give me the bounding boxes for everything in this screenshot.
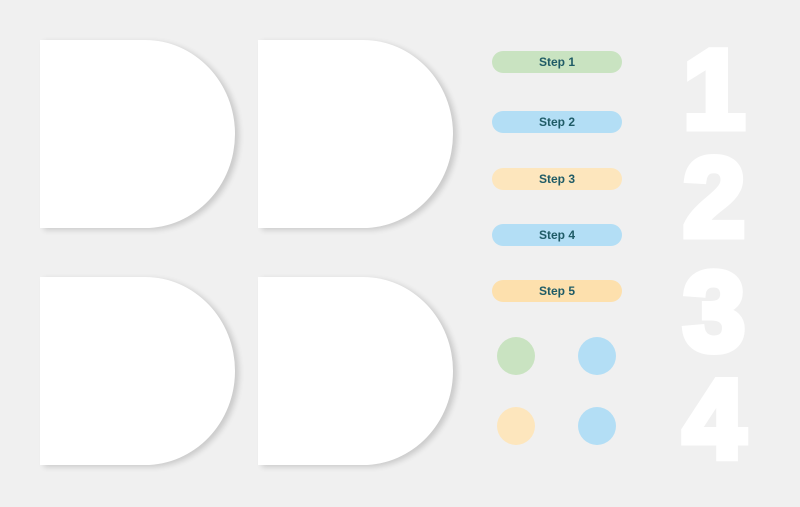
circle: blue 2 <box>578 407 616 445</box>
panel: top-left D shape <box>40 40 235 228</box>
panel: bottom-right D shape <box>258 277 453 465</box>
circle: yellow <box>497 407 535 445</box>
pill: step 2: Step 2 <box>539 115 575 129</box>
pill: step 5 <box>492 280 622 302</box>
panel: bottom-left D shape <box>40 277 235 465</box>
number 2: 2 <box>683 135 745 260</box>
pill: step 3: Step 3 <box>539 172 575 186</box>
circle: green <box>497 337 535 375</box>
pill: step 1 <box>492 51 622 73</box>
pill: step 1: Step 1 <box>539 55 575 69</box>
number 4: 4 <box>683 357 745 482</box>
number 3: 3 <box>683 249 745 374</box>
circle: blue <box>578 337 616 375</box>
number 1: 1 <box>683 27 745 152</box>
pill: step 2 <box>492 111 622 133</box>
pill: step 5: Step 5 <box>539 284 575 298</box>
pill: step 3 <box>492 168 622 190</box>
pill: step 4 <box>492 224 622 246</box>
pill: step 4: Step 4 <box>539 228 575 242</box>
panel: top-right D shape <box>258 40 453 228</box>
